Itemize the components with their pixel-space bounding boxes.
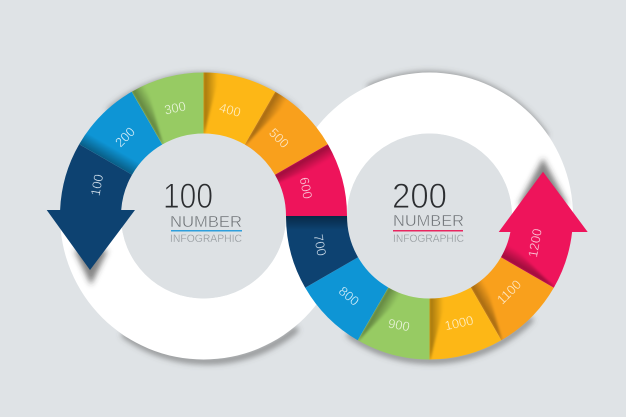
right center label: INFOGRAPHIC bbox=[393, 233, 464, 245]
segment 300: 300 bbox=[163, 98, 187, 118]
segment 1100 bbox=[470, 257, 554, 340]
right inner disc bbox=[347, 134, 512, 298]
right center label: 200 bbox=[392, 177, 447, 216]
segment 1000: 1000 bbox=[443, 313, 475, 333]
segment 900 bbox=[358, 288, 430, 360]
arrow shadow: 100 bbox=[74, 250, 108, 285]
right center label: NUMBER bbox=[393, 213, 464, 230]
segment 1100: 1100 bbox=[494, 277, 524, 307]
segment 500: 500 bbox=[266, 125, 292, 151]
segment 600 bbox=[275, 144, 347, 216]
segment 500 bbox=[244, 92, 328, 175]
right white ring bbox=[286, 72, 573, 216]
left center label bbox=[163, 177, 242, 245]
arrow shadow: 1200 bbox=[518, 158, 568, 205]
segment 600: 600 bbox=[297, 176, 315, 200]
segment 800: 800 bbox=[336, 283, 362, 309]
arrow segment 1200: 1200 bbox=[525, 227, 545, 259]
segment 900: 900 bbox=[387, 316, 411, 334]
arrow segment 1200 bbox=[499, 172, 588, 289]
segment 400: 400 bbox=[218, 100, 242, 120]
colored ring shadow: right bottom bbox=[350, 320, 530, 361]
segment 1000 bbox=[430, 287, 501, 362]
segment 800 bbox=[305, 252, 403, 350]
segment 300 bbox=[132, 72, 204, 144]
left center label: INFOGRAPHIC bbox=[170, 233, 242, 245]
left inner disc bbox=[121, 134, 286, 298]
segment 200 bbox=[79, 92, 162, 175]
left white ring bbox=[60, 216, 347, 360]
white ring shadow: right top bbox=[370, 74, 545, 135]
white ring shadow: left bottom bbox=[125, 330, 295, 361]
segment 400 bbox=[204, 70, 275, 145]
colored ring shadow: left top bbox=[110, 75, 295, 110]
left center label: NUMBER bbox=[170, 214, 242, 231]
arrow segment 100: 100 bbox=[88, 173, 106, 197]
segment 200: 200 bbox=[112, 124, 138, 150]
arrow segment 100 bbox=[47, 144, 135, 270]
left center label: 100 bbox=[163, 177, 213, 216]
segment 700: 700 bbox=[311, 233, 329, 257]
segment 700 bbox=[284, 216, 358, 288]
right center label bbox=[392, 177, 464, 245]
